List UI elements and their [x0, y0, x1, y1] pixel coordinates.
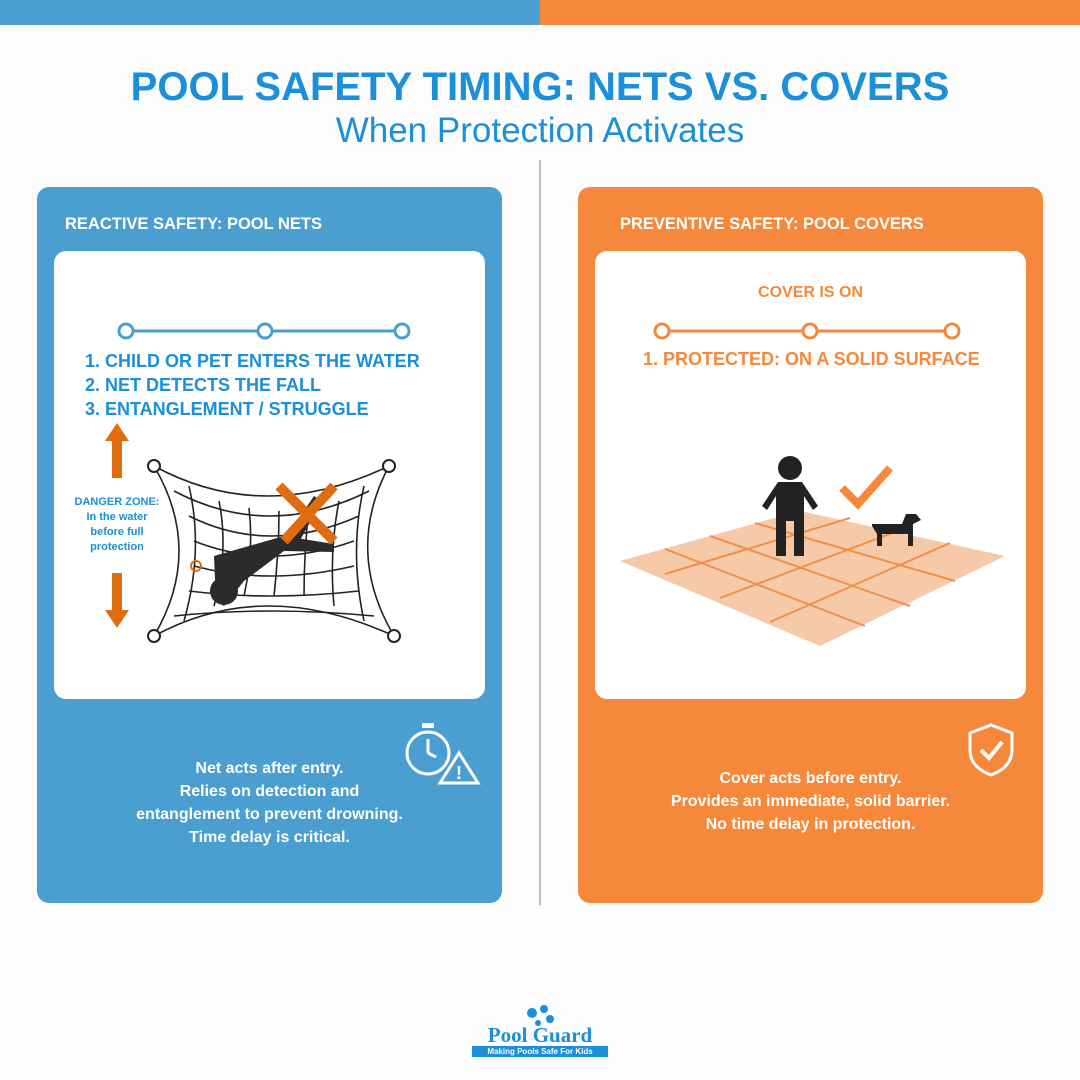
heading: nets: REACTIVE SAFETY: POOL NETS	[65, 215, 322, 233]
steps list: nets: 1. CHILD OR PET ENTERS THE WATER	[85, 351, 420, 371]
steps list: nets: 3. ENTANGLEMENT / STRUGGLE	[85, 399, 369, 419]
panel: reactive safety nets	[37, 187, 502, 903]
icon: stopwatch warning: !	[456, 763, 462, 783]
icon: stopwatch warning	[406, 723, 481, 784]
white card: covers	[595, 251, 1026, 699]
footer text: nets: Time delay is critical.	[189, 829, 350, 846]
illustration: cover with person and dog	[620, 456, 1005, 646]
subtitle: When Protection Activates	[336, 111, 744, 150]
timeline: covers	[654, 322, 960, 340]
illustration: net with child	[147, 459, 401, 643]
icon: shield check	[968, 723, 1014, 777]
white card: nets	[54, 251, 485, 699]
steps list: nets	[85, 351, 420, 419]
logo: pool guard: Pool Guard	[488, 1023, 592, 1047]
footer text: covers: Cover acts before entry.	[720, 770, 902, 787]
step: protected: 1. PROTECTED: ON A SOLID SURFACE	[643, 349, 980, 369]
danger zone label: before full	[90, 526, 144, 538]
footer text: nets: Net acts after entry.	[195, 760, 344, 777]
footer text: covers	[671, 770, 950, 833]
footer text: covers: No time delay in protection.	[706, 816, 915, 833]
logo: pool guard	[472, 1005, 608, 1057]
label: cover is on: COVER IS ON	[758, 284, 863, 301]
title: POOL SAFETY TIMING: NETS VS. COVERS	[131, 65, 949, 109]
panel: preventive safety covers	[578, 187, 1043, 903]
timeline: nets	[118, 322, 410, 340]
danger zone label	[75, 423, 159, 628]
logo: pool guard: Making Pools Safe For Kids	[487, 1047, 593, 1056]
steps list: nets: 2. NET DETECTS THE FALL	[85, 375, 321, 395]
footer text: covers: Provides an immediate, solid barrier.	[671, 793, 950, 810]
footer text: nets: entanglement to prevent drowning.	[136, 806, 403, 823]
danger zone label: protection	[90, 541, 144, 553]
danger zone label: In the water	[86, 511, 148, 523]
top color bar	[0, 0, 1080, 25]
danger zone label: DANGER ZONE:	[75, 496, 159, 508]
footer text: nets: Relies on detection and	[180, 783, 359, 800]
footer text: nets	[136, 760, 403, 846]
heading: covers: PREVENTIVE SAFETY: POOL COVERS	[620, 215, 924, 233]
